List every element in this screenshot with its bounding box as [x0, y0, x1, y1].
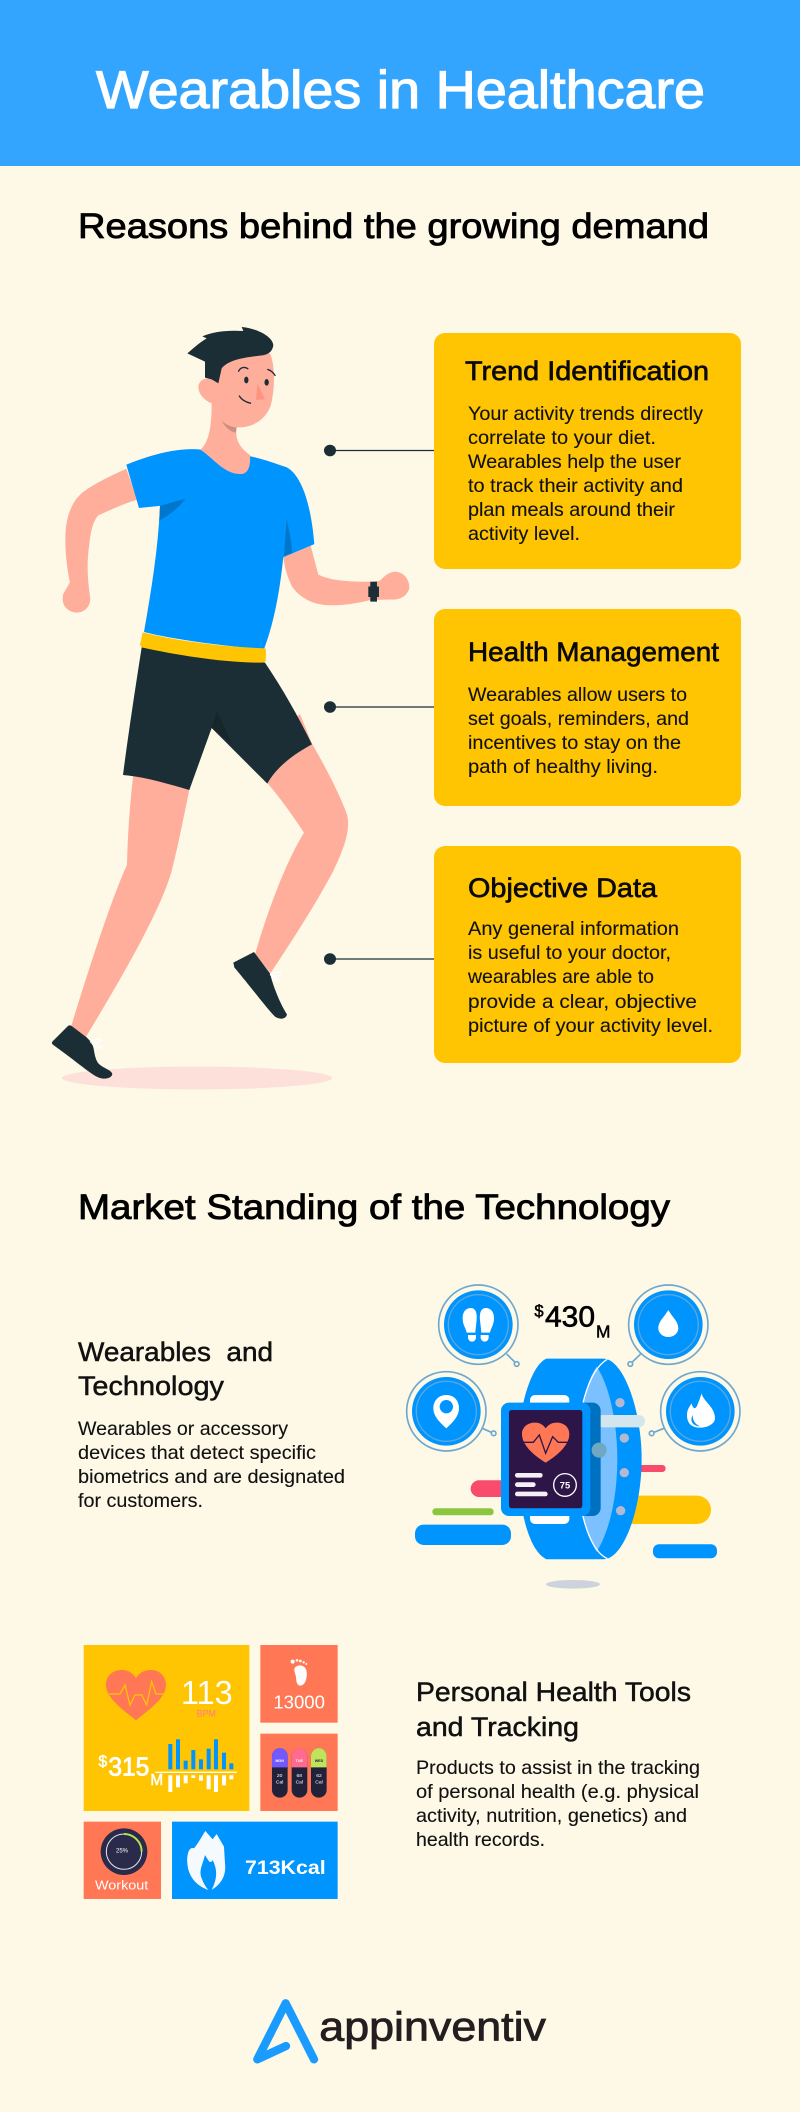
card body: Wearables allow users to [468, 684, 687, 706]
card body: to track their activity and [468, 475, 683, 497]
card heading: Objective Data [468, 873, 658, 903]
card body: path of healthy living. [468, 756, 658, 778]
pill: monday: MON [275, 1759, 284, 1763]
illustration: runner [52, 327, 409, 1090]
logo: appinventiv [257, 2003, 547, 2059]
value: $430M: 430 [545, 1302, 595, 1334]
illustration: smart watch [407, 1285, 740, 1589]
text block: wearables and technology: Wearables or accessory [78, 1418, 288, 1440]
text block: wearables and technology: Technology [78, 1371, 225, 1401]
connector: health management [324, 701, 436, 713]
text block: personal health tools: Personal Health Tools [416, 1677, 691, 1707]
legs and arms [63, 469, 409, 1037]
text block: wearables and technology: devices that detect specific [78, 1442, 316, 1464]
text block: personal health tools [416, 1677, 700, 1851]
pill: wednesday: WED [315, 1759, 324, 1763]
card body: set goals, reminders, and [468, 708, 689, 730]
card body: Wearables help the user [468, 451, 682, 473]
ground shadow [62, 1066, 332, 1090]
strap loops [530, 1395, 569, 1524]
pill: tuesday: Cal [296, 1780, 303, 1786]
t-shirt [126, 449, 314, 649]
flame icon [187, 1831, 225, 1890]
crown [592, 1443, 607, 1458]
value: $430M: M [596, 1321, 610, 1341]
step count: 13000 [273, 1692, 325, 1713]
header banner [0, 0, 800, 166]
icon: footprints [439, 1285, 519, 1366]
shoelaces [90, 972, 281, 1048]
card body: picture of your activity level. [468, 1015, 713, 1037]
front leg [253, 714, 348, 973]
text block: wearables and technology: biometrics and are designated [78, 1466, 345, 1488]
shadow [546, 1580, 600, 1589]
rear leg [71, 751, 189, 1037]
tile: calories burned [172, 1822, 338, 1899]
text block: wearables and technology: for customers. [78, 1490, 203, 1512]
card heading: Health Management [468, 637, 720, 667]
pill: tuesday: TUE [296, 1759, 304, 1763]
shoes [52, 952, 287, 1079]
card body: incentives to stay on the [468, 732, 681, 754]
watch body [560, 1403, 601, 1516]
calories: 713Kcal [245, 1858, 326, 1879]
band interior [577, 1367, 617, 1552]
pill: tuesday: 68 [297, 1773, 302, 1779]
hair [187, 327, 273, 383]
shirt shading [159, 499, 292, 556]
card body: Any general information [468, 918, 679, 940]
card body: wearables are able to [467, 966, 654, 988]
belt [140, 632, 266, 663]
readout lines [515, 1473, 548, 1496]
panel: health management [434, 609, 741, 806]
pill: monday: Cal [276, 1780, 283, 1786]
value: $315M: M [150, 1772, 163, 1789]
text block: wearables and technology [78, 1337, 345, 1512]
value: $315M [98, 1751, 163, 1789]
right arm [283, 546, 409, 605]
card body: correlate to your diet. [468, 427, 656, 449]
icon: location pin [407, 1372, 496, 1451]
score: 75 [560, 1480, 570, 1490]
icon: water drop [628, 1285, 708, 1366]
connector: objective data [324, 953, 436, 965]
heart rate: 113 [181, 1675, 233, 1712]
text block: personal health tools: health records. [416, 1829, 545, 1851]
card body [468, 684, 689, 778]
pill: monday [272, 1748, 288, 1798]
pill: monday: 20 [277, 1773, 283, 1779]
head [187, 327, 275, 482]
card body [468, 403, 703, 545]
pill: wednesday [311, 1748, 327, 1798]
value: $315M: $ [98, 1754, 107, 1771]
shorts fold [212, 711, 232, 744]
chin shadow [222, 421, 237, 433]
heading: reasons: Reasons behind the growing demand [78, 207, 709, 246]
pill: wednesday: Cal [315, 1780, 323, 1786]
card heading: Trend Identification [465, 356, 709, 386]
speed bars [415, 1465, 717, 1558]
workout label: Workout [95, 1878, 149, 1892]
card body: provide a clear, objective [468, 991, 697, 1013]
progress gauge: 25% [116, 1849, 129, 1855]
text block: personal health tools: and Tracking [416, 1712, 579, 1742]
front shoe [233, 952, 287, 1019]
value: $315M: 315 [108, 1751, 149, 1781]
band holes [615, 1398, 629, 1515]
heart icon [522, 1423, 569, 1463]
watch screen [509, 1410, 582, 1508]
card body: is useful to your doctor, [468, 942, 671, 964]
panel: trend identification [434, 333, 741, 569]
card body [467, 918, 713, 1037]
left arm [63, 469, 137, 613]
logo wordmark: appinventiv [319, 2004, 547, 2050]
shorts [123, 647, 312, 790]
pill: wednesday: 62 [316, 1773, 322, 1779]
card body: plan meals around their [468, 499, 676, 521]
rear shoe [52, 1025, 112, 1079]
tile: workout [84, 1822, 161, 1899]
heading: market standing: Market Standing of the Technology [78, 1188, 671, 1227]
tile: heart rate and value [84, 1645, 249, 1811]
value: $430M [534, 1302, 610, 1341]
foot icon [291, 1659, 307, 1686]
connector: trend identification [324, 445, 436, 456]
panel: objective data [434, 846, 741, 1063]
card body: activity level. [468, 523, 580, 545]
pill: tuesday [292, 1748, 307, 1798]
strap keeper [597, 1415, 645, 1427]
text block: personal health tools: Products to assist in the tracking [416, 1757, 700, 1779]
tile: calories by day [260, 1734, 338, 1811]
heart icon [106, 1670, 166, 1720]
text block: personal health tools: of personal health (e.g. physical [416, 1781, 699, 1803]
illustration: health dashboard [84, 1645, 338, 1899]
wristwatch [368, 582, 379, 602]
face and neck [198, 353, 274, 482]
bpm label: BPM [197, 1709, 216, 1719]
logo mark [257, 2003, 314, 2059]
tile: steps [260, 1645, 338, 1723]
value: $430M: $ [534, 1302, 544, 1321]
face features [238, 367, 275, 403]
title: Wearables in Healthcare [96, 61, 705, 120]
shorts and belt [123, 632, 312, 790]
text block: personal health tools: activity, nutrition, genetics) and [416, 1805, 687, 1827]
card body: Your activity trends directly [468, 403, 703, 425]
icon: flame [649, 1372, 740, 1451]
bar chart [155, 1739, 237, 1792]
text block: wearables and technology: Wearables and [78, 1337, 273, 1367]
watch band [517, 1359, 642, 1559]
